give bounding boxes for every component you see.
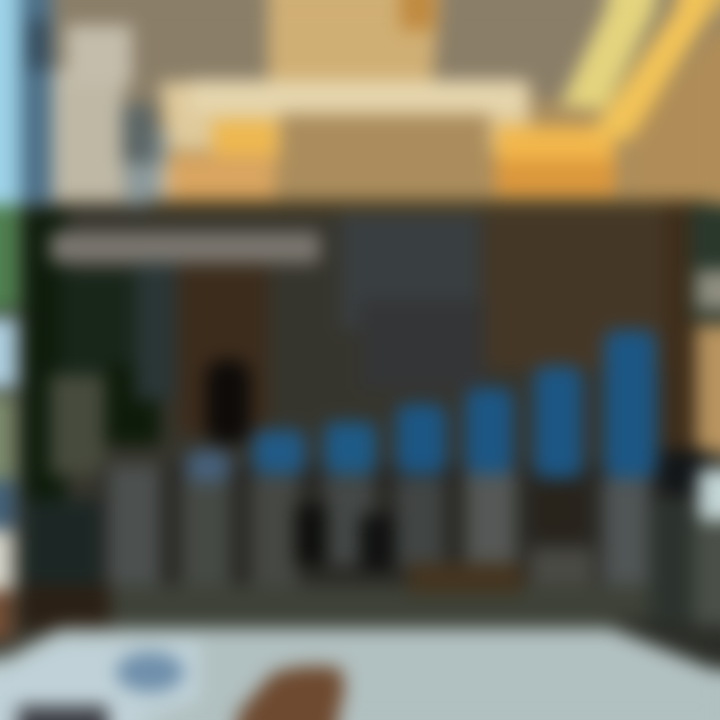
dark object on table [18, 706, 108, 720]
left edge [0, 205, 20, 640]
bar 5 [465, 388, 513, 474]
foliage [24, 210, 175, 600]
bar 7 [604, 330, 656, 478]
bar chart [186, 330, 656, 482]
diagonal ceiling lights [560, 0, 720, 140]
dark display panel [20, 200, 710, 625]
left window [0, 0, 52, 215]
title bar [50, 232, 320, 263]
blue-grey post [122, 105, 210, 210]
bottom strip [20, 500, 720, 672]
white table [0, 628, 720, 720]
bar 4 [396, 404, 446, 474]
brown object on table [232, 666, 344, 720]
white column [52, 25, 132, 200]
dark figure [206, 360, 250, 444]
lower grey columns [100, 465, 700, 615]
right orange glow [495, 126, 615, 196]
bar 3 [324, 422, 376, 474]
bar 6 [534, 366, 582, 478]
bar 2 [253, 430, 305, 474]
chandelier [268, 0, 440, 90]
bar 1 [186, 450, 230, 482]
ceiling light band [160, 80, 530, 194]
brown wall panel [178, 265, 268, 435]
right wall [660, 205, 720, 625]
blue object on table [116, 652, 184, 692]
left orange glow [170, 120, 278, 200]
ceiling [0, 0, 720, 210]
